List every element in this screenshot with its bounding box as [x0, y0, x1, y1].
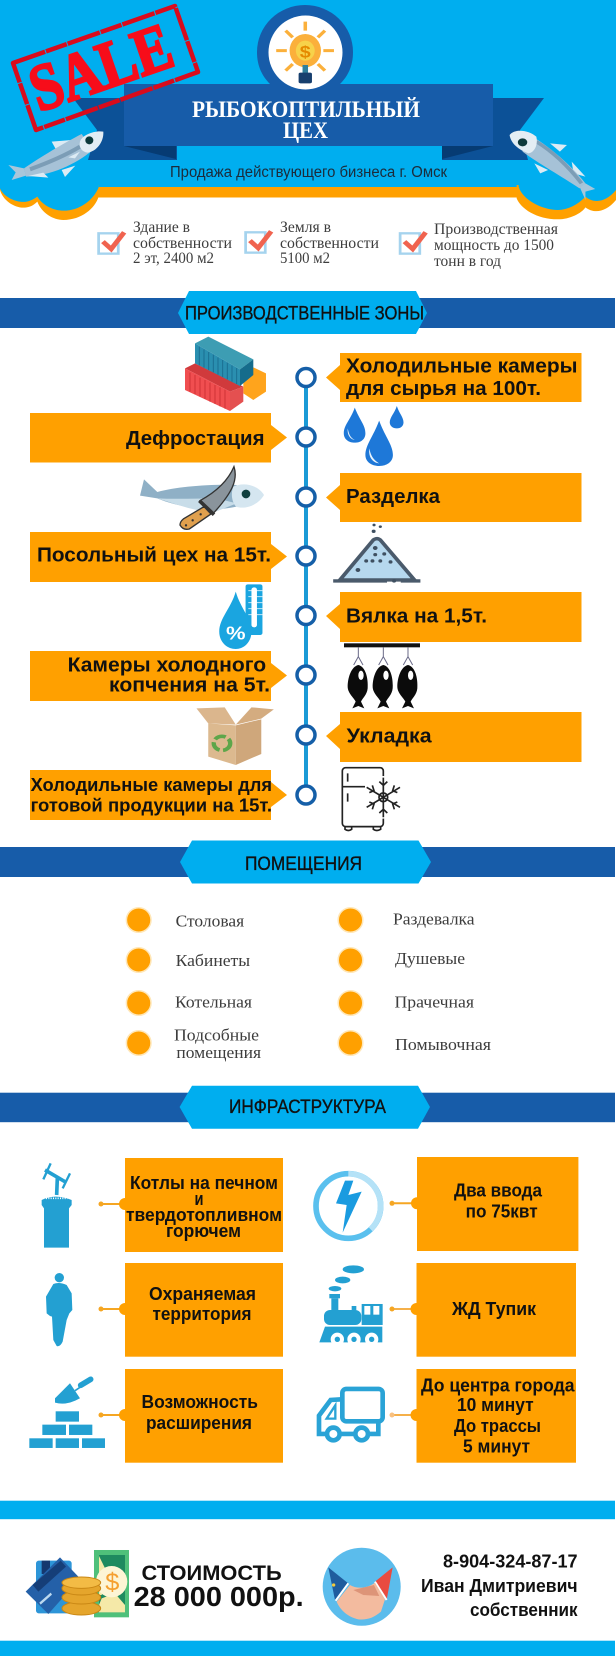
step: cold rooms for raw material — [326, 353, 582, 402]
icon: humidity and thermometer — [219, 584, 262, 649]
left column labels: Подсобные — [174, 1026, 259, 1045]
infra item: security — [46, 1263, 283, 1357]
icon: light bulb medallion: $ — [300, 43, 311, 61]
right column labels: Душевые — [395, 949, 465, 968]
contact details — [421, 1552, 579, 1620]
infra item: railway: ЖД Тупик — [451, 1299, 537, 1319]
infra item: security: Охраняемая — [149, 1284, 256, 1304]
key facts — [99, 219, 558, 270]
section heading: production zones — [0, 291, 615, 334]
icon: money and cards — [26, 1550, 129, 1617]
fact: land: 5100 м2 — [280, 250, 330, 267]
fact: capacity: Производственная — [434, 221, 558, 238]
infra item: distance — [319, 1369, 576, 1463]
step: cold rooms for finished goods: Холодильные камеры для — [31, 774, 272, 795]
infra item: boilers: горючем — [166, 1221, 241, 1241]
bullet markers — [126, 908, 363, 1055]
step: defrosting: Дефростация — [126, 427, 264, 450]
icon: handshake — [323, 1548, 401, 1626]
fact: building: собственности — [133, 235, 232, 252]
price: 28 000 000р. — [134, 1581, 304, 1612]
step: cold rooms for raw material: Холодильные камеры — [346, 356, 578, 378]
infra item: expansion: расширения — [146, 1413, 252, 1433]
icon: cardboard box — [196, 707, 274, 765]
fact: building: Здание в — [133, 219, 190, 236]
icon: fridge and snowflake — [342, 768, 402, 830]
icon: lightning ring — [316, 1174, 381, 1238]
icon: light bulb medallion — [257, 5, 353, 90]
infra item: boilers: и — [194, 1189, 204, 1209]
header scalloped edge — [0, 185, 616, 220]
icon: person silhouette — [46, 1273, 72, 1346]
icon: shipping containers — [185, 337, 266, 411]
step: cutting — [326, 473, 582, 522]
infra item: boilers: Котлы на печном — [130, 1173, 278, 1193]
fact: land — [246, 219, 379, 267]
infra item: power: Два ввода — [454, 1181, 543, 1201]
icon: chimney tower — [42, 1163, 72, 1248]
left column labels: Кабинеты — [176, 951, 251, 970]
right column labels: Прачечная — [394, 993, 474, 1012]
section heading: premises — [0, 840, 615, 884]
step: defrosting — [30, 413, 287, 462]
step: packing: Укладка — [347, 726, 433, 748]
step: drying — [326, 592, 582, 642]
step: salting: Посольный цех на 15т. — [37, 545, 271, 567]
right column labels: Помывочная — [395, 1035, 491, 1054]
right column labels — [393, 910, 491, 1054]
icon: fish and knife — [140, 467, 264, 529]
step: drying: Вялка на 1,5т. — [346, 606, 487, 628]
header panel — [0, 0, 616, 220]
step: packing — [326, 712, 582, 762]
icon: hanging fish — [344, 643, 420, 708]
contact details: собственник — [470, 1600, 579, 1620]
icon: money and cards: $ — [105, 1569, 119, 1597]
footer bottom band — [0, 1641, 615, 1656]
fact: land: Земля в — [280, 219, 331, 236]
infra item: distance: 5 минут — [463, 1437, 530, 1457]
infra item: security: территория — [152, 1304, 252, 1324]
title: РЫБОКОПТИЛЬНЫЙ — [192, 97, 420, 122]
left column labels: Котельная — [175, 993, 252, 1012]
contact details: Иван Дмитриевич — [421, 1576, 578, 1596]
infra item: distance: До трассы — [454, 1416, 541, 1436]
timeline — [297, 368, 315, 804]
fact: building: 2 эт, 2400 м2 — [133, 250, 214, 267]
infra item: boilers — [42, 1158, 283, 1252]
infra item: expansion — [29, 1369, 283, 1463]
infra item: power: по 75квт — [466, 1202, 538, 1222]
fact: capacity: мощность до 1500 — [434, 237, 554, 254]
icon: water drops — [344, 406, 404, 466]
icon: salt pile — [333, 524, 420, 583]
step: cold smoking: Камеры холодного — [68, 655, 266, 677]
subtitle: Продажа действующего бизнеса г. Омск — [170, 164, 447, 181]
title — [192, 97, 420, 143]
infra item: railway — [319, 1263, 576, 1357]
infra item: distance: До центра города — [421, 1376, 575, 1396]
left column labels: помещения — [176, 1043, 261, 1062]
step: cold rooms for finished goods — [30, 770, 287, 820]
contact details: 8-904-324-87-17 — [443, 1552, 578, 1572]
icon: locomotive — [319, 1265, 383, 1345]
step: cold rooms for raw material: для сырья на 100т. — [346, 378, 541, 400]
right column labels: Раздевалка — [393, 910, 475, 929]
ribbon banner — [73, 84, 544, 160]
step: cold smoking — [30, 651, 287, 701]
icon: humidity and thermometer: % — [226, 624, 246, 644]
title: ЦЕХ — [283, 118, 328, 143]
step: cold rooms for finished goods: готовой продукции на 15т. — [31, 795, 272, 816]
infra item: distance: 10 минут — [457, 1395, 534, 1415]
icon: left fish — [8, 131, 103, 180]
section heading: premises: ПОМЕЩЕНИЯ — [245, 854, 362, 875]
premises list — [126, 908, 491, 1062]
price — [134, 1561, 304, 1612]
fact: capacity — [400, 221, 558, 270]
icon: bricks and trowel — [29, 1379, 105, 1448]
icon: right fish — [510, 131, 595, 200]
infra item: power — [316, 1157, 578, 1251]
fact: building — [99, 219, 232, 267]
fact: land: собственности — [280, 235, 379, 252]
infra item: expansion: Возможность — [142, 1392, 258, 1412]
infra item: boilers: твердотопливном — [126, 1205, 282, 1225]
icon: truck — [319, 1389, 383, 1440]
price: СТОИМОСТЬ — [142, 1561, 282, 1585]
step: cold smoking: копчения на 5т. — [109, 675, 270, 697]
footer top band — [0, 1501, 615, 1519]
step: cutting: Разделка — [346, 486, 441, 508]
section heading: infrastructure — [0, 1086, 615, 1129]
section heading: infrastructure: ИНФРАСТРУКТУРА — [229, 1097, 386, 1118]
fact: capacity: тонн в год — [434, 253, 501, 270]
step: salting — [30, 532, 287, 582]
sale stamp: SALE — [20, 10, 182, 126]
section heading: production zones: ПРОИЗВОДСТВЕННЫЕ ЗОНЫ — [185, 302, 424, 324]
left column labels: Столовая — [176, 912, 244, 931]
left column labels — [174, 912, 261, 1062]
